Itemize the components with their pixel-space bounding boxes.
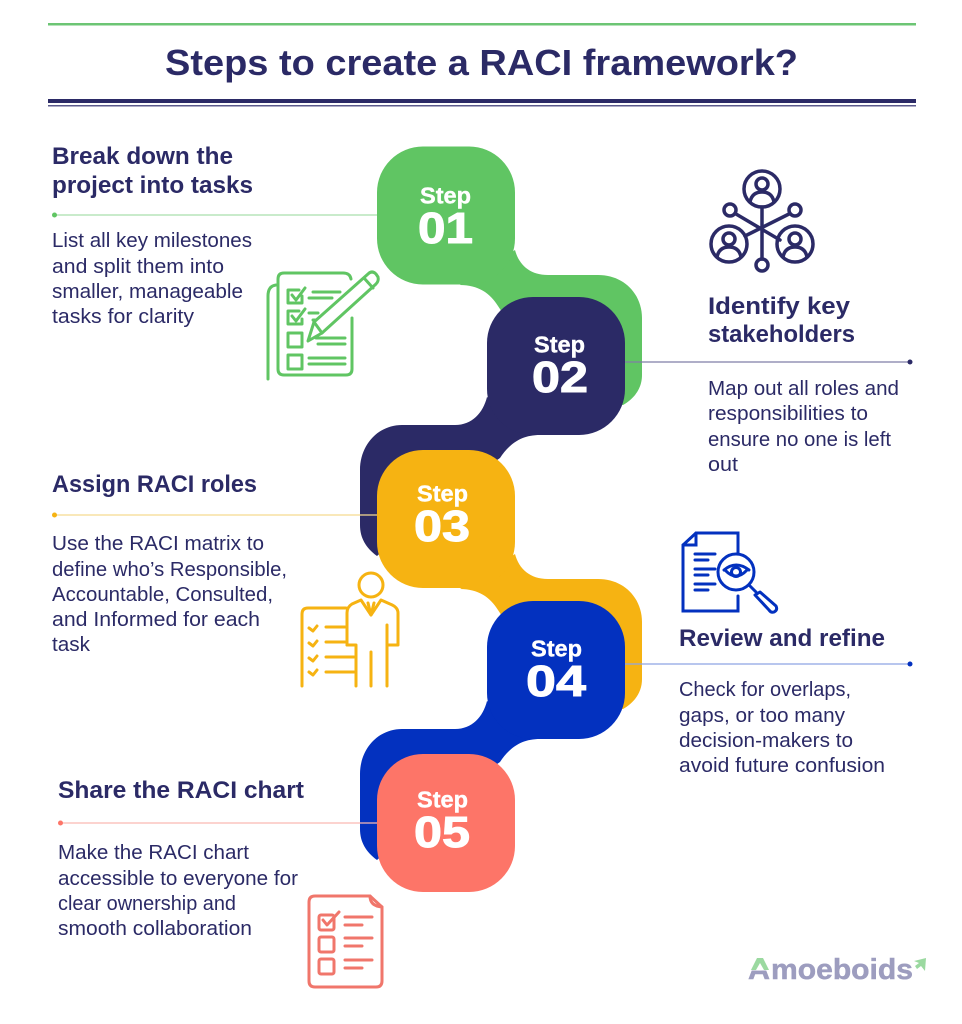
step 1 block: Step [420,182,471,208]
step 4 block: Step [531,636,582,662]
ribbon: step 4 connector [360,701,540,860]
title: Steps to create a RACI framework? [165,42,798,83]
panel: step 2 text: Identify key [708,293,851,320]
panel: step 3 text [52,471,377,656]
panel: step 2 text: ensure no one is left [708,429,891,451]
panel: step 4 text [625,625,912,777]
icon: stakeholder network [711,171,813,271]
icon: report checklist [309,896,382,987]
step 2 block [487,297,625,435]
panel: step 1 text: List all key milestones [52,230,252,252]
step 5 block: 05 [414,808,470,857]
logo: Amoeboids: moeboids [771,954,913,986]
step 2 block: Step [534,332,585,358]
panel: step 1 text: Break down the [52,143,233,170]
panel: step 1 text: and split them into [52,256,224,278]
panel: step 3 text: Accountable, Consulted, [52,584,273,606]
panel: step 2 text: stakeholders [708,321,855,348]
icon: document with magnifier [683,533,777,612]
icon: person with checklist [302,573,398,686]
ribbon: step 3 connector [460,554,642,709]
panel: step 2 text [625,293,912,476]
step 4 block [487,601,625,739]
icon: checklist and pencil [268,272,378,379]
panel: step 3 text: define who’s Responsible, [52,559,287,581]
step 3 block [377,450,515,588]
panel: step 3 text: and Informed for each [52,609,260,631]
panel: step 1 text: tasks for clarity [52,306,194,328]
panel: step 2 text: responsibilities to [708,403,868,425]
panel: step 4 text: Check for overlaps, [679,679,851,701]
step 5 block [377,754,515,892]
panel: step 1 text [52,143,377,328]
logo: Amoeboids: A [748,954,770,986]
step 2 block: 02 [532,353,588,402]
panel: step 5 text: Make the RACI chart [58,842,249,864]
ribbon: step 1 connector [460,250,642,405]
panel: step 1 text: smaller, manageable [52,281,243,303]
panel: step 4 text: Review and refine [679,625,885,652]
panel: step 4 text: gaps, or too many [679,705,845,727]
panel: step 3 text: Assign RACI roles [52,471,257,498]
ribbon: step 2 connector [360,397,540,556]
panel: step 5 text: clear ownership and [58,893,236,915]
panel: step 1 text: project into tasks [52,172,253,199]
panel: step 5 text [58,777,377,940]
panel: step 2 text: Map out all roles and [708,378,899,400]
step 5 block: Step [417,786,468,812]
panel: step 4 text: avoid future confusion [679,755,885,777]
panel: step 5 text: accessible to everyone for [58,868,298,890]
step 1 block: 01 [418,204,473,253]
step 4 block: 04 [526,657,587,706]
step 3 block: 03 [414,502,470,551]
panel: step 3 text: Use the RACI matrix to [52,533,264,555]
panel: step 5 text: smooth collaboration [58,918,252,940]
step 1 block [377,146,515,284]
step 3 block: Step [417,480,468,506]
panel: step 3 text: task [52,634,91,656]
panel: step 4 text: decision-makers to [679,730,853,752]
panel: step 5 text: Share the RACI chart [58,777,304,804]
panel: step 2 text: out [708,454,738,476]
